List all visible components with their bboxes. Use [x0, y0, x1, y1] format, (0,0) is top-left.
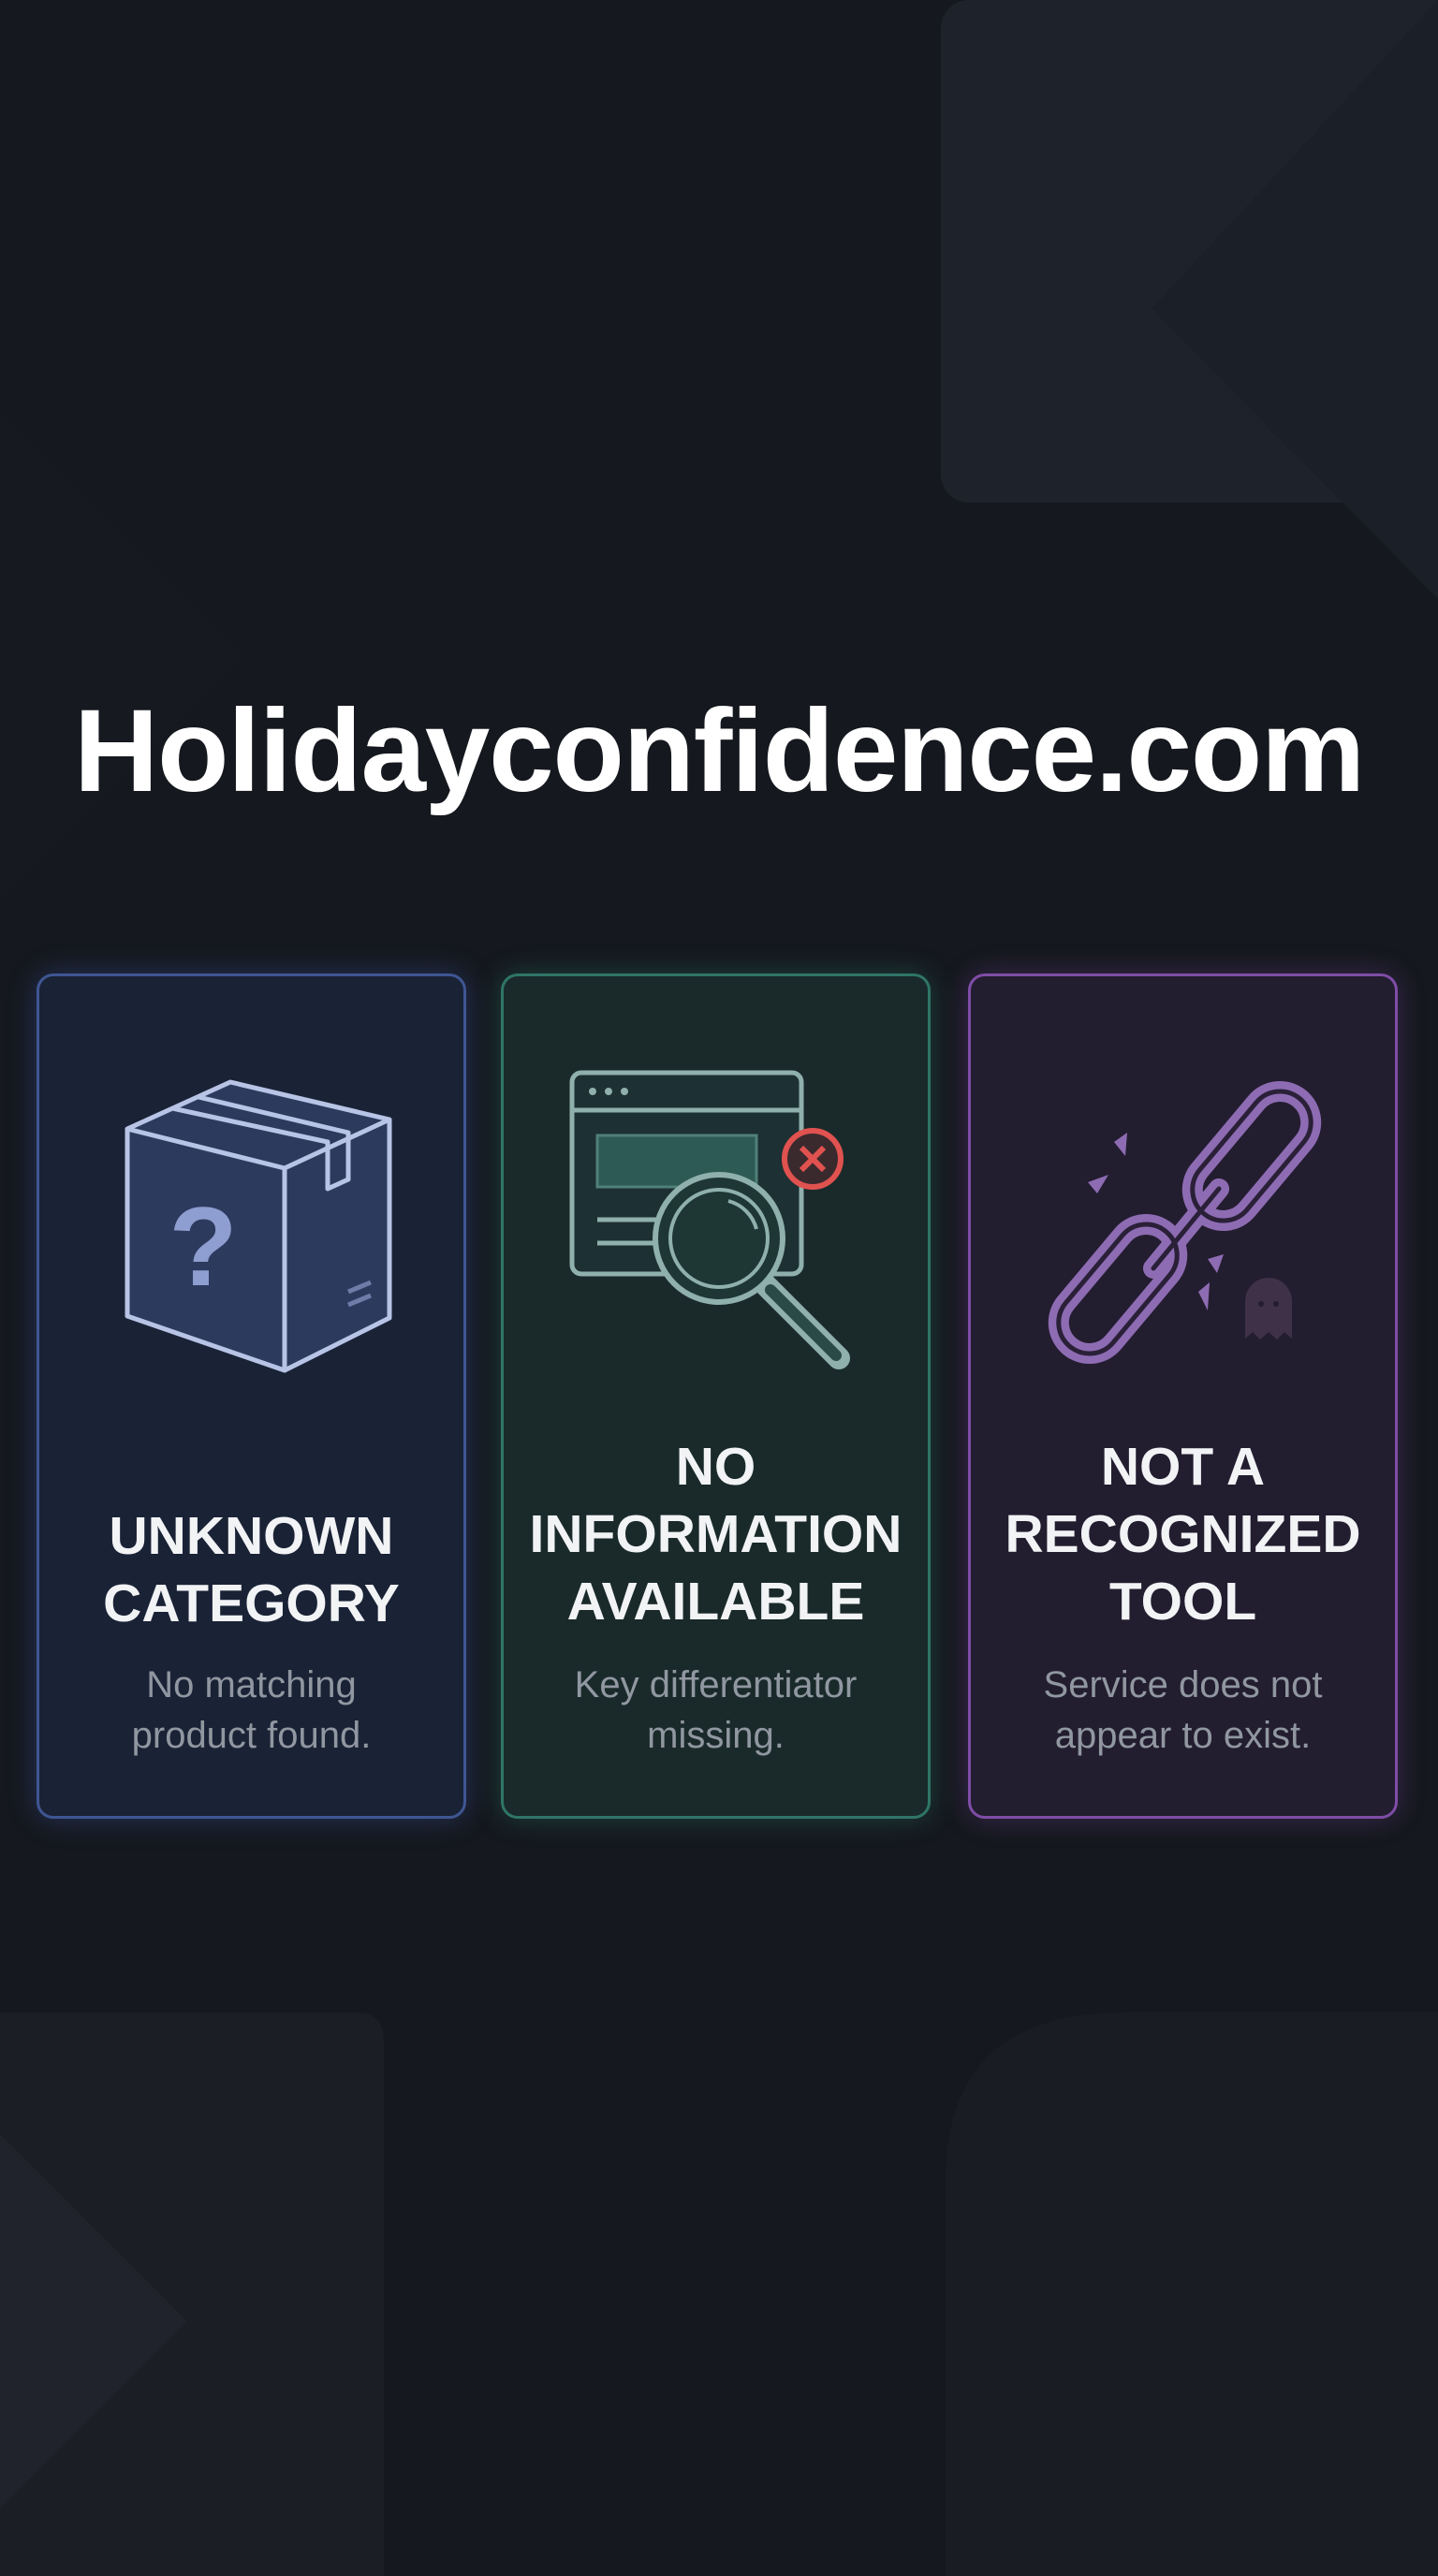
- panel: not a recognized tool: [968, 973, 1398, 1819]
- ghost: [1245, 1278, 1292, 1339]
- icon: broken chain with ghost: [1049, 1081, 1322, 1364]
- panel: unknown category: [37, 973, 466, 1819]
- heading: [530, 1437, 902, 1632]
- description: [575, 1664, 857, 1756]
- icon: browser with magnifier: [569, 1071, 850, 1369]
- description: [132, 1664, 371, 1756]
- heading: AVAILABLE: [567, 1572, 864, 1632]
- heading: CATEGORY: [103, 1573, 400, 1633]
- heading: [103, 1506, 400, 1633]
- heading: [1005, 1437, 1361, 1632]
- description: missing.: [647, 1715, 785, 1756]
- description: [1044, 1664, 1322, 1756]
- heading: INFORMATION: [530, 1504, 902, 1564]
- description: product found.: [132, 1715, 371, 1756]
- heading: RECOGNIZED: [1005, 1504, 1361, 1564]
- description: Service does not: [1044, 1664, 1322, 1705]
- heading: TOOL: [1109, 1572, 1256, 1632]
- icon: box with question mark: ?: [169, 1184, 238, 1310]
- description: Key differentiator: [575, 1664, 857, 1705]
- heading: UNKNOWN: [110, 1506, 393, 1566]
- panel: no information available: [501, 973, 931, 1819]
- title: Holidayconfidence.com: [74, 686, 1364, 816]
- heading: NO: [676, 1437, 756, 1497]
- icon: box with question mark: [125, 1080, 391, 1372]
- heading: NOT A: [1101, 1437, 1265, 1497]
- description: No matching: [146, 1664, 357, 1705]
- description: appear to exist.: [1055, 1715, 1311, 1756]
